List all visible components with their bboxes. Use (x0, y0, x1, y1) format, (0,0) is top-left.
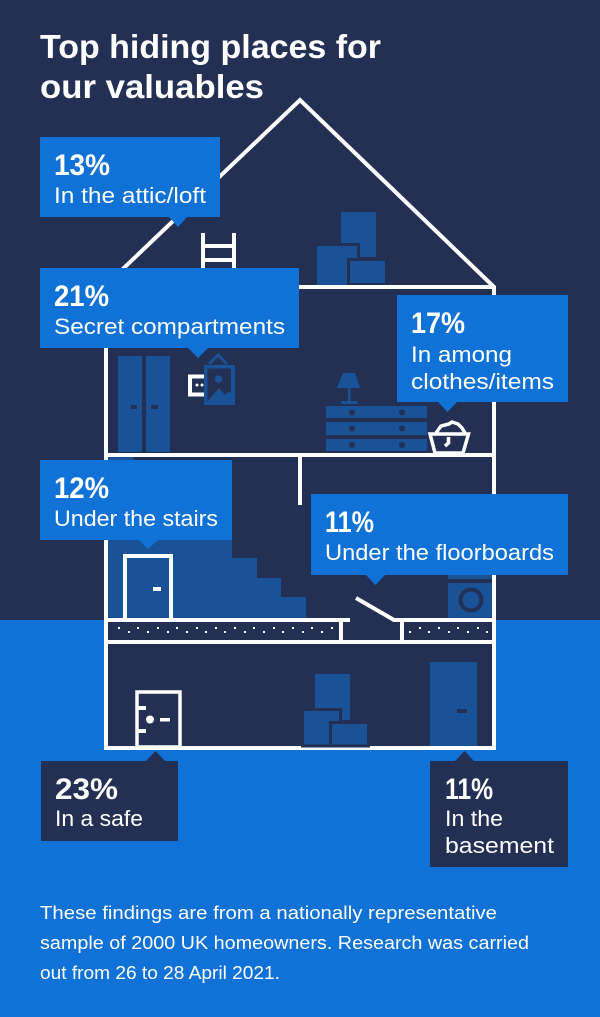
house outline (106, 100, 494, 620)
callout: secret compartments: Secret compartments (54, 314, 285, 339)
callout: in a safe: 23% (55, 773, 118, 806)
icon: wall socket (190, 376, 206, 394)
house interior fills (106, 620, 494, 748)
callout: under the stairs: Under the stairs (54, 506, 218, 531)
footer note: These findings are from a nationally representative (40, 903, 497, 923)
floor structure with trapdoor (104, 598, 496, 750)
callout: clothes (397, 295, 568, 412)
icon: laundry basket (430, 422, 468, 453)
icon: safe (137, 692, 180, 747)
title: our valuables (40, 68, 264, 105)
callout: in a safe (41, 751, 178, 841)
icon: basement door (430, 662, 477, 746)
icon: staircase (108, 457, 306, 619)
callout: in the basement (430, 751, 568, 867)
title: Top hiding places for (40, 28, 381, 65)
footer note: out from 26 to 28 April 2021. (40, 963, 280, 983)
callout: in the basement: In the (445, 806, 503, 831)
callout: under the floorboards: Under the floorboards (325, 540, 554, 565)
callout: clothes: 17% (411, 307, 465, 340)
callout: in the basement: basement (445, 833, 555, 858)
callout: under the stairs (40, 460, 232, 549)
callout: in a safe: In a safe (55, 806, 143, 831)
icon: wardrobe (118, 356, 170, 452)
callout: under the stairs: 12% (54, 472, 109, 505)
callout: attic: 13% (54, 149, 110, 182)
icon: washing machine (448, 570, 492, 619)
callout: under the floorboards (311, 494, 568, 585)
callout: clothes: In among (411, 342, 512, 367)
callout: in the basement: 11% (445, 773, 493, 806)
callout: secret compartments: 21% (54, 280, 109, 313)
icon: basement boxes (302, 674, 368, 746)
icon: attic boxes (316, 212, 386, 286)
icon: picture frame (204, 355, 235, 405)
callout: clothes: clothes/items (411, 369, 554, 394)
icon: ladder (201, 233, 236, 269)
callout: attic (40, 137, 220, 227)
footer note (40, 903, 529, 983)
footer note: sample of 2000 UK homeowners. Research was carried (40, 933, 529, 953)
icon: chest of drawers (326, 406, 427, 451)
icon: door under stairs (125, 556, 171, 620)
icon: lamp (337, 373, 360, 404)
title (40, 28, 381, 105)
callout: attic: In the attic/loft (54, 183, 207, 208)
floor insulation dots (118, 627, 488, 633)
callout: secret compartments (40, 268, 299, 358)
callout: under the floorboards: 11% (325, 506, 374, 539)
